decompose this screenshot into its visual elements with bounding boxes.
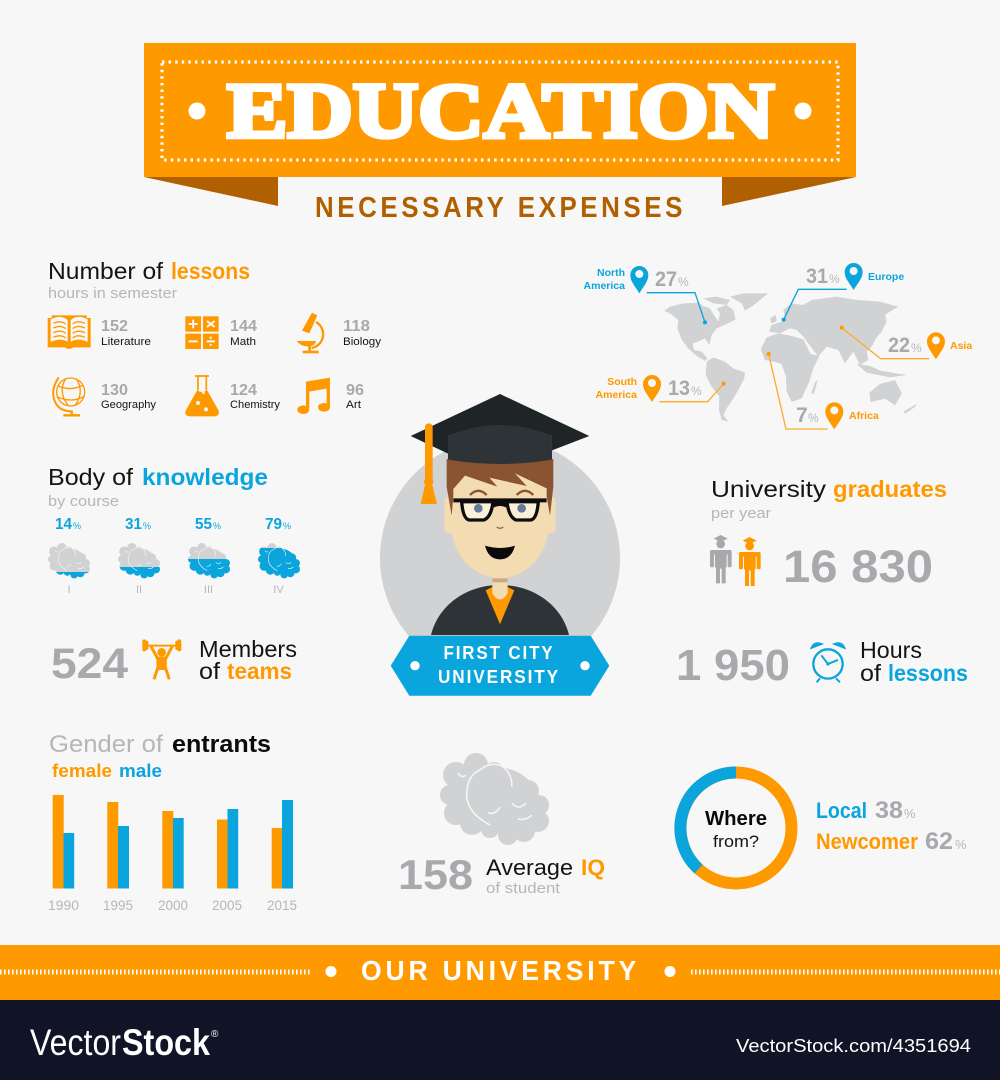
- panel: gender of entrants: [48, 731, 297, 913]
- heading: university graduates: University: [711, 476, 827, 502]
- subject values: 130: [101, 382, 128, 399]
- percentages: [55, 516, 291, 533]
- course numerals: II: [136, 584, 142, 596]
- panel: number of lessons: [48, 258, 382, 416]
- panel: where from donut: from?: [713, 832, 759, 851]
- pin: Asia: [927, 332, 945, 359]
- legend: 62: [925, 828, 953, 855]
- panel: number of lessons: hours in semester: [48, 285, 177, 302]
- map labels and percentages: %: [678, 275, 689, 289]
- map labels and percentages: 7: [796, 404, 808, 427]
- map labels and percentages: %: [829, 272, 840, 286]
- percentages: %: [213, 521, 221, 531]
- percentages: 14: [55, 516, 72, 533]
- subject values: Chemistry: [230, 399, 280, 411]
- stat: hours of lessons: lessons: [888, 660, 968, 686]
- subtitle: NECESSARY EXPENSES: [315, 192, 686, 224]
- icon: book: [48, 315, 91, 349]
- subject values: [101, 318, 382, 411]
- icon: alarm clock: [811, 643, 845, 682]
- panel: average IQ: Average: [486, 855, 573, 880]
- watermark bar: VectorStock.com/4351694: [736, 1035, 971, 1056]
- stat: members of teams: Members: [199, 636, 297, 662]
- map labels and percentages: %: [808, 411, 819, 425]
- map labels and percentages: America: [584, 280, 625, 292]
- ribbon: university name: FIRST CITY: [444, 643, 554, 663]
- panel: where from donut: Where: [705, 808, 767, 830]
- pin: Europe: [845, 263, 863, 290]
- panel: average IQ: 158: [398, 851, 473, 898]
- stat: hours of lessons: of: [860, 660, 882, 686]
- brain icon: course II: [118, 543, 160, 578]
- map: continents: [664, 293, 917, 422]
- heading: number of lessons: Number of: [48, 258, 164, 284]
- subject values: Literature: [101, 336, 151, 348]
- map labels and percentages: 22: [888, 334, 910, 357]
- stat: members of teams: teams: [227, 658, 292, 684]
- stat: graduates: 16 830: [783, 541, 933, 592]
- stat: members of teams: [51, 636, 297, 688]
- subject values: Biology: [343, 336, 382, 348]
- footer band: [0, 945, 1000, 1000]
- panel: number of lessons: lessons: [171, 258, 250, 284]
- stat: hours of lessons: 1 950: [676, 641, 790, 690]
- bar chart: [53, 795, 293, 888]
- percentages: 79: [265, 516, 282, 533]
- head: [444, 459, 556, 578]
- legend: [52, 761, 162, 781]
- icon: globe: [53, 377, 85, 415]
- legend: [816, 797, 967, 855]
- brain icon: course III: [188, 543, 230, 578]
- panel: university graduates: per year: [711, 505, 771, 522]
- course numerals: I: [67, 584, 71, 596]
- subject values: 124: [230, 382, 257, 399]
- map labels and percentages: Asia: [950, 340, 972, 352]
- connector lines: [647, 289, 929, 429]
- percentages: %: [73, 521, 81, 531]
- subject values: Math: [230, 336, 256, 348]
- brain icon: course IV: [258, 543, 300, 578]
- course numerals: IV: [273, 584, 284, 596]
- map labels and percentages: [584, 265, 972, 427]
- panel: body of knowledge: by course: [48, 493, 119, 510]
- year labels: 1990: [48, 898, 79, 913]
- map labels and percentages: South: [607, 376, 637, 388]
- stat: members of teams: of: [199, 658, 221, 684]
- brain icon: course I: [48, 543, 90, 578]
- year labels: [48, 898, 297, 913]
- footer text: OUR UNIVERSITY: [361, 955, 640, 986]
- subject values: 96: [346, 382, 364, 399]
- icon: calculator: [185, 316, 219, 349]
- panel: where from donut: [680, 772, 967, 884]
- icon: grey graduate: [710, 535, 732, 583]
- ribbon: university name: UNIVERSITY: [438, 667, 560, 687]
- map labels and percentages: 13: [668, 377, 690, 400]
- legend: Newcomer: [816, 829, 918, 854]
- heading: gender of entrants: Gender of: [49, 731, 163, 758]
- legend: female: [52, 761, 112, 781]
- title text: EDUCATION: [227, 67, 774, 154]
- map labels and percentages: %: [691, 384, 702, 398]
- map labels and percentages: 31: [806, 265, 828, 288]
- legend: %: [955, 837, 967, 852]
- map labels and percentages: North: [597, 267, 625, 279]
- stat: members of teams: 524: [51, 640, 128, 688]
- stat: hours of lessons: [676, 637, 968, 690]
- legend: %: [904, 806, 916, 821]
- year labels: 2000: [158, 898, 188, 913]
- tassel: [421, 423, 437, 504]
- watermark bar: [0, 1000, 1000, 1080]
- map labels and percentages: 27: [655, 268, 677, 291]
- map labels and percentages: Europe: [868, 271, 904, 283]
- subject values: 144: [230, 318, 257, 335]
- central graduate figure: [380, 394, 620, 696]
- panel: average IQ: of student: [486, 880, 561, 897]
- icon: weightlifter: [142, 639, 181, 679]
- heading: body of knowledge: Body of: [48, 464, 134, 490]
- ribbon: university name: [391, 636, 609, 696]
- legend: male: [119, 761, 162, 781]
- percentages: 55: [195, 516, 212, 533]
- stat: hours of lessons: Hours: [860, 637, 922, 663]
- year labels: 2015: [267, 898, 297, 913]
- subject icons: [48, 313, 330, 416]
- legend: 38: [875, 797, 903, 824]
- donut chart: [680, 772, 792, 884]
- percentages: %: [143, 521, 151, 531]
- panel: university graduates: graduates: [833, 476, 947, 502]
- watermark bar: ®: [211, 1029, 219, 1040]
- icon: orange graduate: [739, 537, 761, 586]
- panel: body of knowledge: knowledge: [142, 464, 268, 490]
- map labels and percentages: America: [596, 389, 637, 401]
- pin: North America: [630, 266, 648, 293]
- subject values: 152: [101, 318, 128, 335]
- year labels: 1995: [103, 898, 133, 913]
- subject values: 118: [343, 318, 370, 335]
- icon: large brain: [440, 753, 549, 845]
- percentages: %: [283, 521, 291, 531]
- panel: average IQ: IQ: [581, 855, 605, 880]
- subject values: Art: [346, 399, 361, 411]
- title banner: [144, 43, 856, 206]
- watermark bar: Stock: [122, 1022, 210, 1063]
- map labels and percentages: %: [911, 341, 922, 355]
- course numerals: III: [204, 584, 213, 596]
- subject values: Geography: [101, 399, 156, 411]
- icon: microscope: [297, 313, 323, 353]
- watermark bar: Vector: [30, 1022, 121, 1063]
- year labels: 2005: [212, 898, 242, 913]
- mortarboard hat: [411, 394, 589, 504]
- icon: flask: [185, 376, 219, 416]
- gown: [431, 585, 569, 635]
- grey circle: [380, 450, 620, 636]
- panel: world map: [630, 263, 945, 429]
- map labels and percentages: Africa: [849, 410, 879, 422]
- percentages: 31: [125, 516, 142, 533]
- panel: university graduates: [710, 476, 947, 592]
- panel: average IQ: [398, 753, 605, 898]
- pin: Africa: [825, 402, 843, 429]
- panel: gender of entrants: entrants: [172, 731, 271, 758]
- pin: South America: [643, 375, 661, 402]
- icon: music note: [297, 378, 330, 414]
- panel: body of knowledge: [48, 464, 300, 596]
- legend: Local: [816, 798, 867, 823]
- course numerals: [67, 584, 284, 596]
